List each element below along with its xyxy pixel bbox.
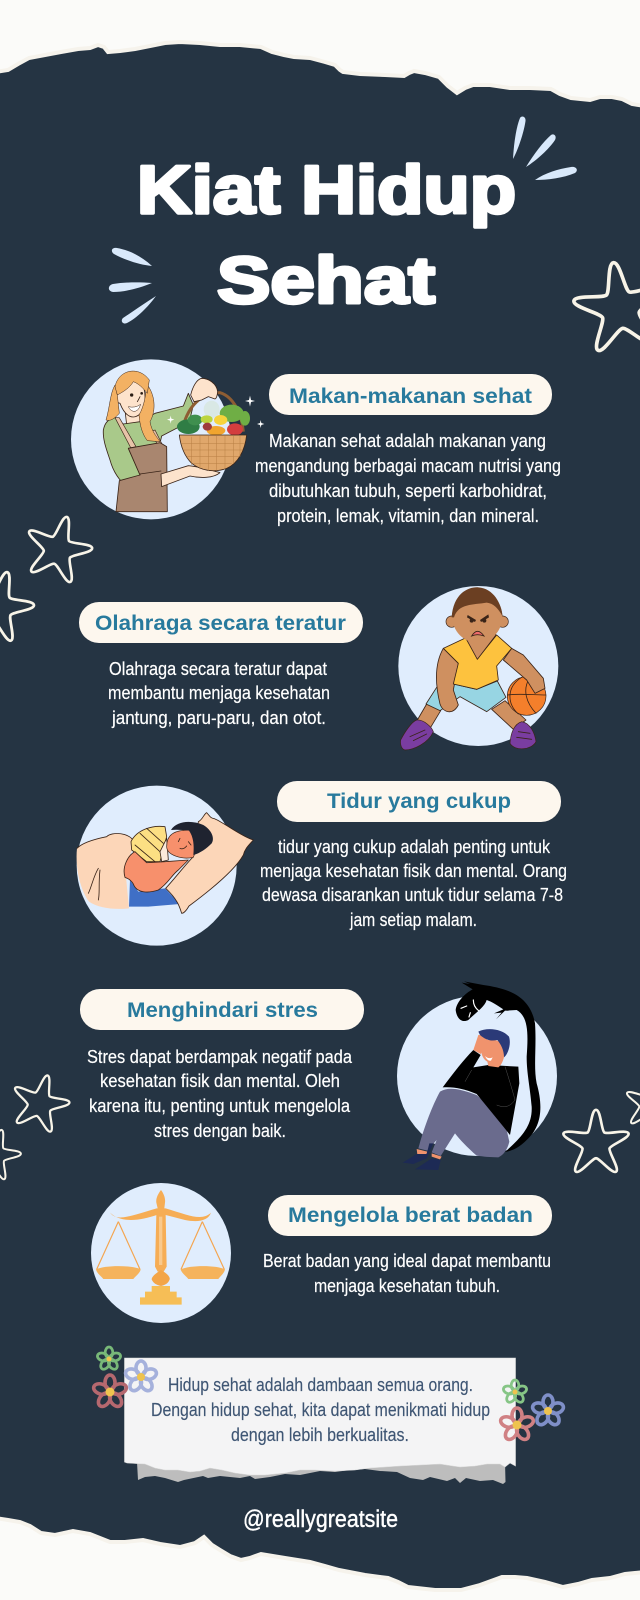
heading: berat badan: Mengelola berat badan [288, 1203, 533, 1227]
callout: torn note: Hidup sehat adalah dambaan semua orang. [168, 1374, 473, 1395]
text block: tidur: menjaga kesehatan fisik dan mental. Orang [260, 860, 567, 881]
icon: flowers right [499, 1380, 565, 1442]
icon: star top right [569, 256, 640, 353]
icon: star left edge [0, 563, 40, 644]
icon: sparkle lines top right [513, 117, 577, 180]
icon: sparkle lines left [109, 248, 156, 324]
text block: stres: Stres dapat berdampak negatif pada [87, 1046, 353, 1067]
text block: olahraga [108, 658, 330, 728]
text block: olahraga: Olahraga secara teratur dapat [109, 658, 327, 679]
heading: makan [269, 374, 552, 415]
icon: star lower right edge [622, 1075, 640, 1130]
heading: tidur [277, 781, 561, 822]
text block: makan: dibutuhkan tubuh, seperti karbohidrat, [269, 480, 547, 501]
panel: basketball illustration [398, 586, 558, 750]
text block: stres [87, 1046, 353, 1141]
text block: tidur [260, 836, 567, 930]
panel: healthy food illustration [71, 359, 264, 519]
heading: olahraga [79, 602, 363, 643]
text block: makan [255, 430, 561, 526]
text block: makan: mengandung berbagai macam nutrisi yang [255, 455, 561, 476]
panel: stress illustration [397, 981, 557, 1170]
icon: flowers left [92, 1347, 158, 1409]
icon: star left upper [19, 509, 98, 585]
text block: berat badan: menjaga kesehatan tubuh. [314, 1275, 500, 1296]
icon: star lower right [563, 1110, 629, 1172]
text block: olahraga: jantung, paru-paru, dan otot. [111, 707, 326, 728]
text block: stres: karena itu, penting untuk mengelola [89, 1095, 351, 1116]
icon: star lower left [7, 1068, 75, 1135]
heading: berat badan [268, 1195, 552, 1236]
text block: berat badan [263, 1250, 551, 1296]
title: Kiat Hidup [137, 152, 516, 228]
heading: stres: Menghindari stres [127, 998, 318, 1022]
title [137, 152, 516, 317]
footer handle: @reallygreatsite [243, 1506, 398, 1533]
callout: torn note: dengan lebih berkualitas. [231, 1424, 409, 1445]
text block: tidur: tidur yang cukup adalah penting untuk [278, 836, 551, 857]
text block: stres: kesehatan fisik dan mental. Oleh [100, 1070, 340, 1091]
panel: sleeping illustration [77, 786, 253, 946]
text block: tidur: jam setiap malam. [349, 909, 477, 930]
callout: torn note: Dengan hidup sehat, kita dapat menikmati hidup [151, 1399, 490, 1420]
text block: berat badan: Berat badan yang ideal dapat membantu [263, 1250, 551, 1271]
heading: makan: Makan-makanan sehat [289, 384, 532, 408]
text block: makan: Makanan sehat adalah makanan yang [269, 430, 546, 451]
callout: torn note [124, 1358, 516, 1484]
heading: stres [80, 989, 364, 1030]
title: Sehat [217, 243, 435, 317]
heading: olahraga: Olahraga secara teratur [95, 611, 347, 635]
text block: olahraga: membantu menjaga kesehatan [108, 682, 330, 703]
heading: tidur: Tidur yang cukup [327, 789, 511, 813]
panel: scale illustration [91, 1183, 231, 1323]
text block: makan: protein, lemak, vitamin, dan mineral. [277, 505, 539, 526]
icon: star lower left edge [0, 1124, 26, 1182]
text block: tidur: dewasa disarankan untuk tidur selama 7-8 [262, 884, 563, 905]
text block: stres: stres dengan baik. [154, 1120, 286, 1141]
